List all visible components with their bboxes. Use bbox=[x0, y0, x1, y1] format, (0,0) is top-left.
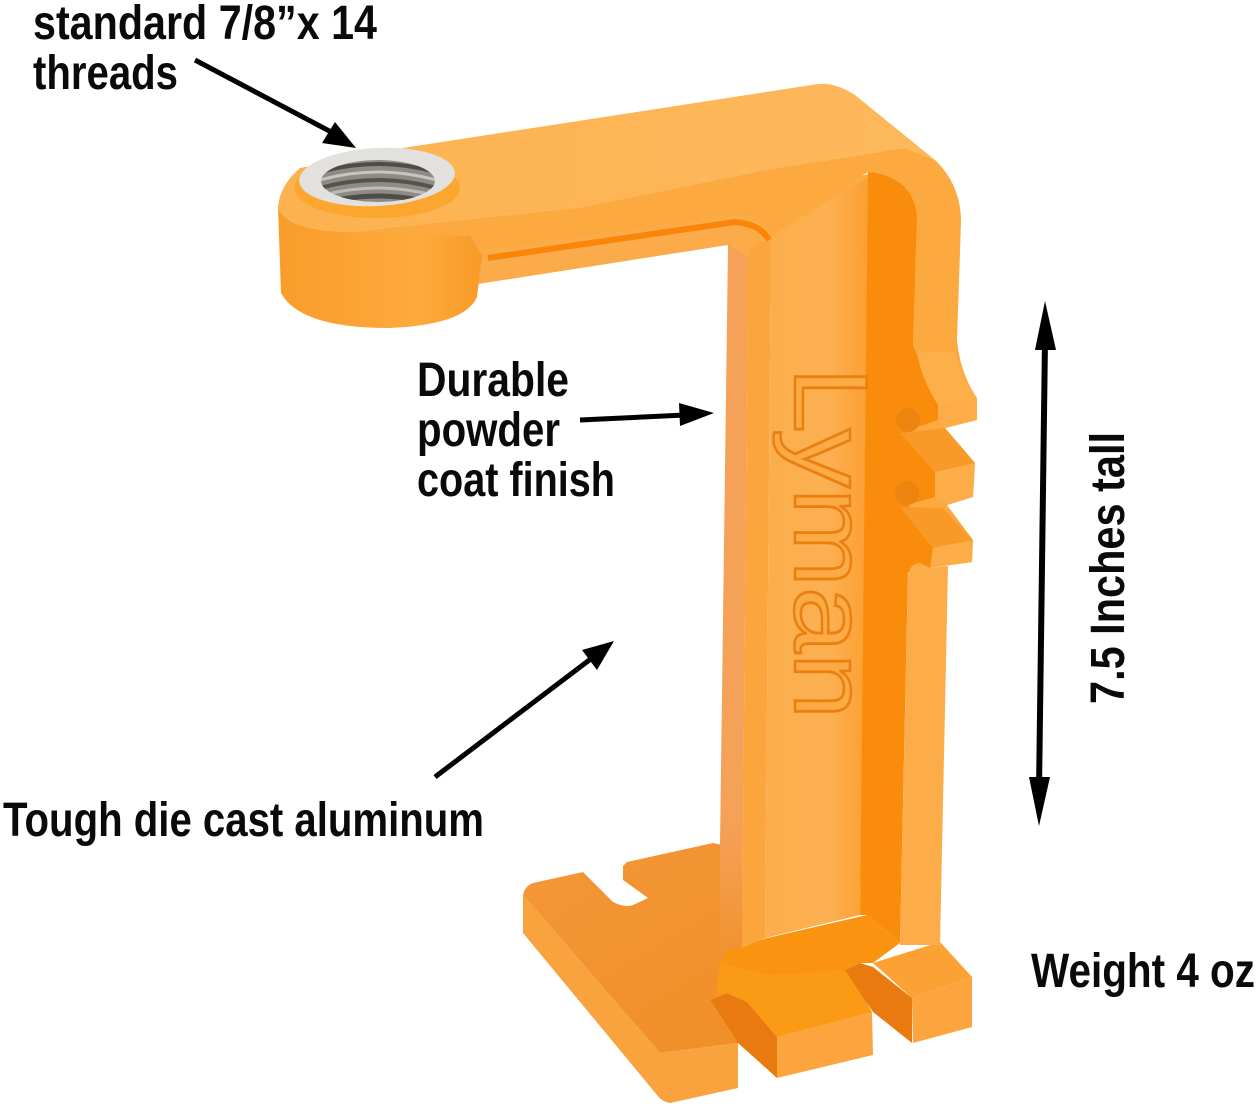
text: tough die cast aluminum: Tough die cast aluminum bbox=[3, 794, 484, 847]
vertical column bbox=[720, 170, 917, 962]
arm top face bbox=[278, 84, 935, 232]
double-headed arrow bbox=[1029, 301, 1056, 826]
plate top surface bbox=[523, 843, 872, 1053]
callout: threads bbox=[33, 0, 377, 148]
middle tab top bbox=[716, 962, 872, 1037]
text: standard threads bbox=[33, 0, 377, 100]
arrow to body bbox=[435, 641, 614, 777]
slot left bbox=[710, 993, 777, 1078]
base plate bbox=[523, 843, 972, 1103]
steel insert ring bbox=[298, 144, 456, 210]
text: durable powder coat finish: coat finish bbox=[417, 454, 615, 507]
column upper backing bbox=[728, 170, 880, 300]
arm fillet shadow line bbox=[488, 222, 769, 258]
right tab front bbox=[912, 977, 972, 1043]
threaded bore bbox=[320, 160, 436, 204]
plate left side face bbox=[523, 895, 738, 1103]
embossed Lyman logo: Lyman bbox=[772, 367, 888, 719]
text: durable powder coat finish bbox=[417, 354, 615, 507]
text: standard threads: threads bbox=[33, 47, 178, 100]
middle tab front bbox=[777, 1012, 873, 1078]
text: 7.5 inches tall: 7.5 Inches tall bbox=[1082, 432, 1135, 704]
text: durable powder coat finish: Durable bbox=[417, 354, 569, 407]
column inner strip bbox=[742, 237, 771, 948]
threaded hub bbox=[278, 144, 482, 328]
height dimension bbox=[1029, 301, 1135, 826]
arrow to threads bbox=[195, 60, 356, 148]
lower arm underside bbox=[478, 215, 750, 284]
column left side strip bbox=[720, 245, 748, 962]
upper arm front and right wall bbox=[458, 148, 977, 573]
right channel bbox=[860, 172, 917, 943]
arrow to finish bbox=[580, 403, 714, 426]
column front face bbox=[765, 176, 870, 938]
upper ledge fill bbox=[720, 915, 900, 975]
hub cylinder side bbox=[278, 207, 482, 328]
callout: die cast aluminum bbox=[3, 641, 614, 847]
slot right bbox=[845, 963, 912, 1043]
product: orange die stand bbox=[278, 84, 977, 1103]
hub flange bbox=[294, 158, 460, 218]
right lower wall bbox=[900, 563, 948, 945]
right tab top bbox=[873, 942, 972, 998]
right-side notches bbox=[895, 352, 977, 568]
arm front band bbox=[347, 148, 905, 250]
text: durable powder coat finish: powder bbox=[417, 404, 560, 457]
channel upper detail bbox=[868, 172, 938, 573]
callout: powder coat bbox=[417, 354, 714, 507]
